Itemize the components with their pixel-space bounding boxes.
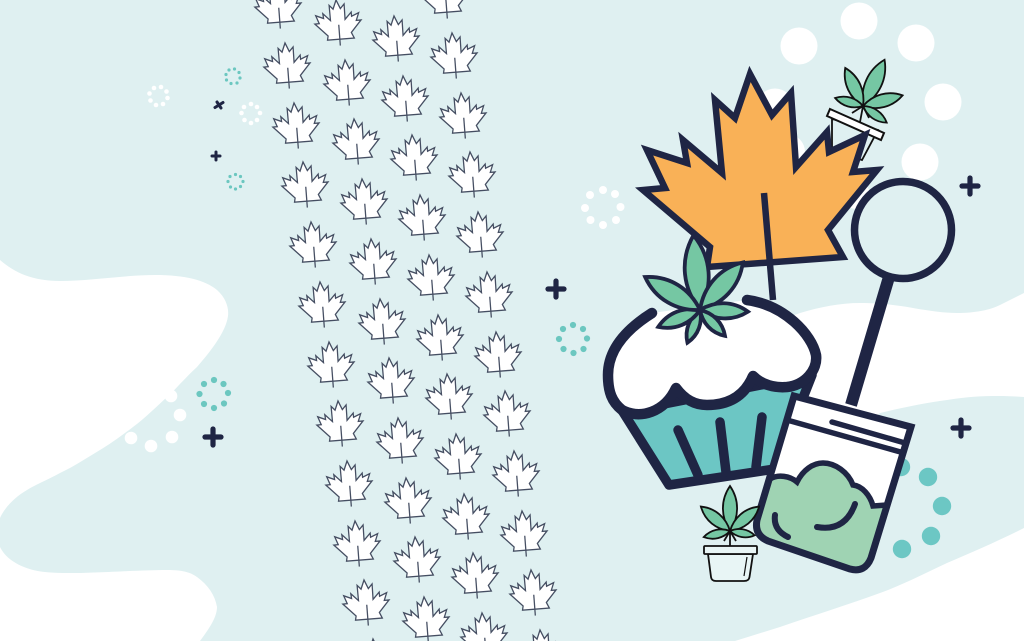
dotted ring: small teal lower (226, 173, 245, 191)
dotted ring: small white left (147, 85, 170, 107)
leaf column 2 (315, 0, 449, 641)
leaf column 3 (373, 16, 507, 641)
plant leaves (834, 56, 904, 126)
icon: cupcake (608, 234, 816, 485)
leaf column 1 (255, 0, 398, 641)
icon: bag of cannabis (756, 396, 911, 570)
white circles top right (756, 2, 962, 209)
white wave: upper left (0, 260, 228, 518)
icon: potted plant bottom (697, 486, 763, 581)
leaf stem (764, 193, 773, 300)
bag content marks (775, 504, 855, 537)
frosting (608, 300, 816, 414)
plant leaves (697, 486, 763, 541)
maple leaf pattern (255, 0, 565, 641)
pot body (708, 554, 753, 581)
cupcake liner (623, 375, 812, 485)
white wave: lower left (0, 547, 217, 641)
dotted ring: white centre (581, 186, 624, 229)
bag body (756, 396, 911, 570)
bag outline (756, 396, 911, 570)
pot body (832, 119, 878, 160)
zip seal lines (787, 420, 904, 453)
icon: magnifying glass (851, 182, 952, 405)
teal dots by bag (892, 458, 951, 558)
bag contents (756, 463, 887, 570)
leaf column 4 (422, 0, 565, 641)
cannabis leaf garnish (640, 234, 750, 345)
dotted ring: teal centre (556, 322, 590, 356)
white wave: bottom right (735, 528, 1024, 641)
white dots on left wave (125, 390, 186, 452)
plus marks (205, 102, 978, 445)
dotted ring: teal left (196, 377, 231, 411)
pot rim (704, 546, 757, 554)
icon: potted plant top (827, 56, 904, 160)
white wave: right band (745, 293, 1024, 500)
dotted ring: small white right (239, 102, 262, 125)
dotted ring: small teal top (224, 67, 242, 85)
pot rim (827, 109, 884, 140)
plant stem (724, 531, 736, 546)
liner ridges (678, 417, 762, 475)
icon: large maple leaf (643, 74, 877, 300)
